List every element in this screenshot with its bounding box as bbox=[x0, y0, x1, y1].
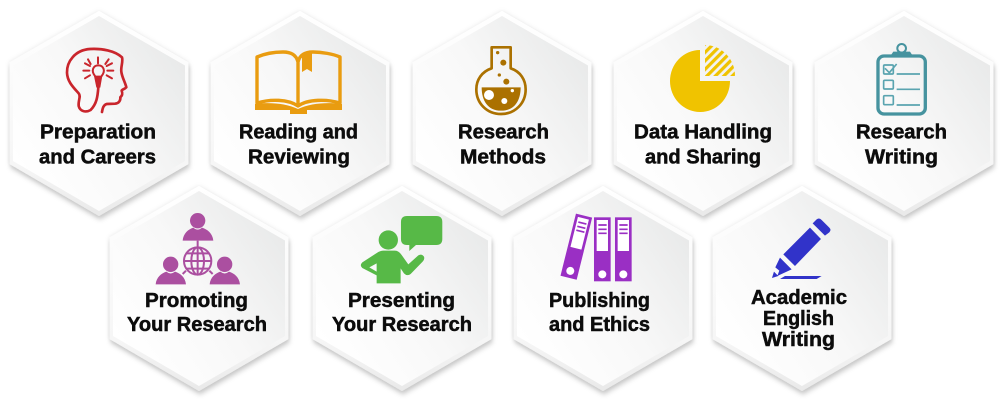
label: Academic bbox=[751, 287, 847, 309]
icon: people around globe bbox=[156, 213, 240, 284]
icon: pie chart bbox=[670, 45, 735, 112]
panel: Data Handling and Sharing bbox=[614, 11, 792, 216]
panel: Research Writing bbox=[814, 11, 994, 216]
label: Research bbox=[856, 122, 947, 144]
label: Preparation bbox=[40, 122, 156, 144]
panel: Preparation and Careers bbox=[10, 11, 188, 216]
icon: flask bbox=[476, 47, 526, 114]
panel: Promoting Your Research bbox=[110, 186, 288, 391]
icon: presenter with speech bubble bbox=[361, 216, 442, 283]
icon: clipboard checklist bbox=[878, 44, 925, 114]
panel: Academic English Writing bbox=[712, 186, 892, 391]
label line 2: Your Research bbox=[127, 314, 267, 336]
label line 2: and Ethics bbox=[549, 314, 650, 336]
label line 3: Writing bbox=[762, 329, 835, 351]
icon: head with light bulb bbox=[67, 49, 126, 112]
icon: open book bbox=[255, 52, 342, 114]
label: Presenting bbox=[348, 290, 455, 312]
panel: Presenting Your Research bbox=[312, 186, 492, 391]
label line 2: Writing bbox=[865, 146, 938, 168]
panel: Reading and Reviewing bbox=[210, 11, 390, 216]
label line 2: Methods bbox=[460, 146, 546, 168]
panel: Publishing and Ethics bbox=[514, 186, 692, 391]
icon: binders bbox=[560, 214, 632, 281]
icon: pen bbox=[772, 218, 830, 279]
label: Reading and bbox=[239, 122, 358, 144]
label: Publishing bbox=[549, 290, 650, 312]
panel: Research Methods bbox=[412, 11, 592, 216]
label: Promoting bbox=[145, 290, 248, 312]
label line 2: Your Research bbox=[332, 314, 472, 336]
label: Data Handling bbox=[634, 122, 772, 144]
label line 2: English bbox=[763, 308, 834, 330]
label line 2: and Careers bbox=[39, 146, 156, 168]
label line 2: and Sharing bbox=[645, 146, 761, 168]
label line 2: Reviewing bbox=[248, 146, 350, 168]
label: Research bbox=[458, 122, 549, 144]
